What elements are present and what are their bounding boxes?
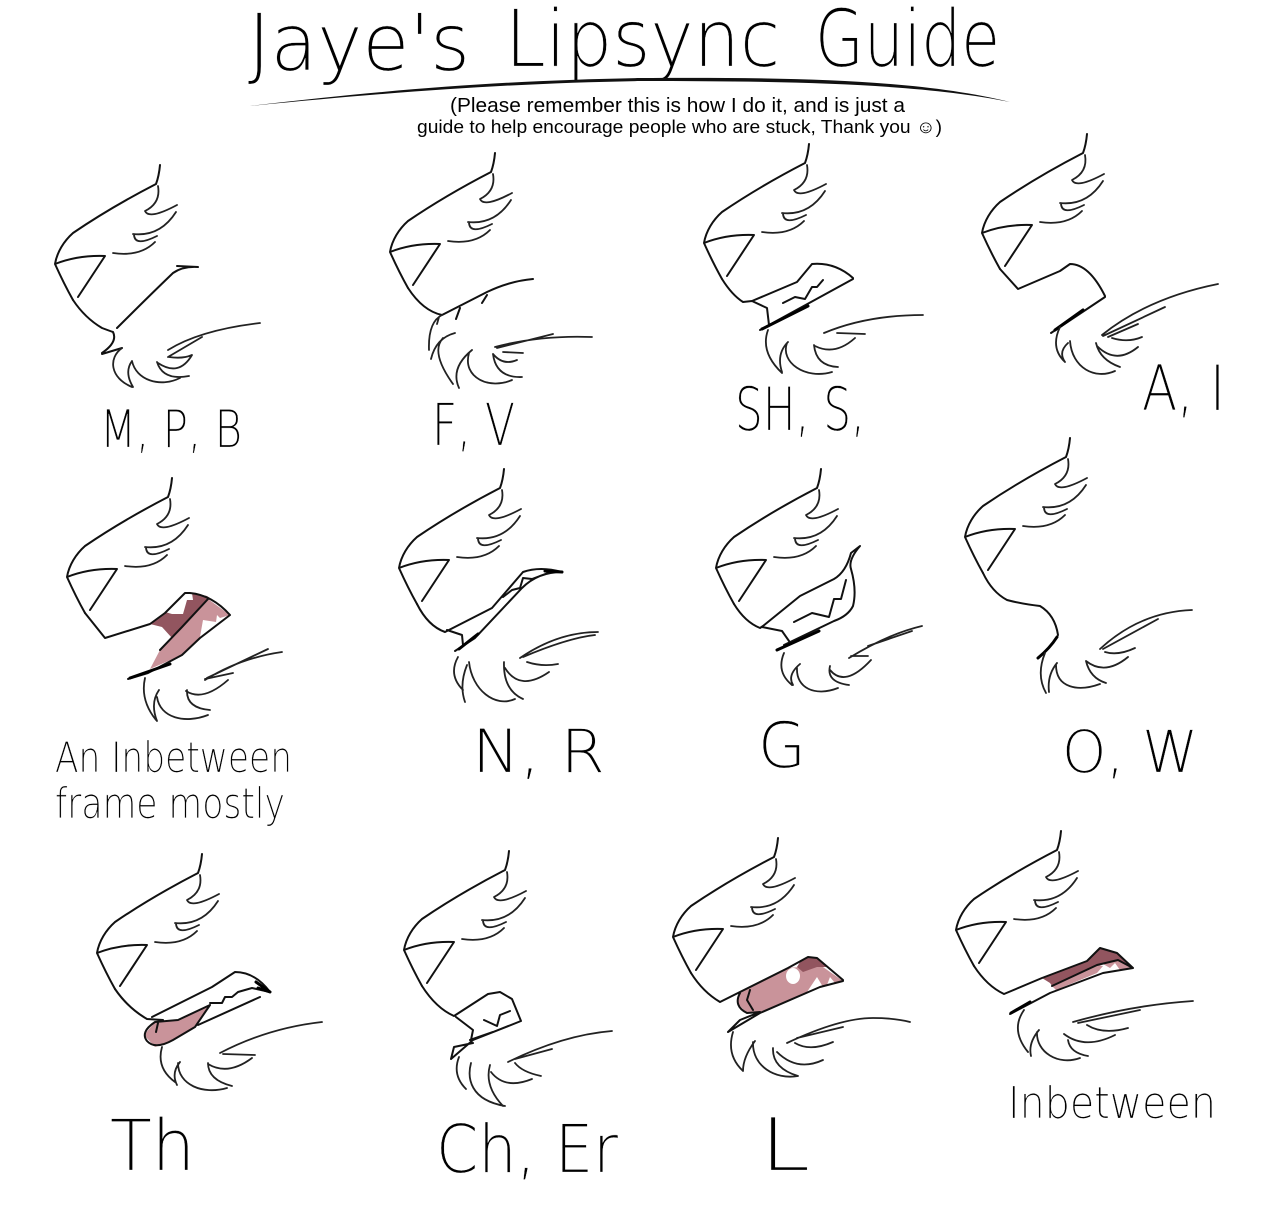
mouth outline bbox=[691, 957, 843, 1032]
mouth roof dark bbox=[797, 957, 828, 972]
mouth roof dark bbox=[1042, 948, 1133, 986]
fur and whisker bbox=[731, 1018, 910, 1077]
panel: Th bbox=[97, 854, 322, 1187]
panel: Ch, Er bbox=[404, 851, 619, 1188]
fur and whisker bbox=[766, 315, 923, 374]
label: M, P, B bbox=[100, 400, 242, 460]
subtitle note bbox=[417, 95, 942, 137]
fur and whisker bbox=[1041, 610, 1192, 693]
wide open mouth bbox=[734, 546, 860, 645]
panel: O, W bbox=[965, 438, 1198, 786]
jaw accent bbox=[1038, 637, 1057, 658]
jaw accent bbox=[1011, 1002, 1030, 1013]
narrow mouth bbox=[417, 569, 562, 651]
jaw accent bbox=[459, 571, 562, 649]
pursed lips bbox=[983, 573, 1058, 635]
panel: inbetween frame bbox=[55, 478, 292, 782]
title underline swoosh bbox=[250, 78, 1010, 106]
label: A, I bbox=[1142, 352, 1225, 425]
panel: L bbox=[673, 838, 910, 1187]
panel: F, V bbox=[390, 153, 592, 459]
tongue bbox=[737, 962, 843, 1013]
subtitle note: guide to help encourage people who are stuck, Thank you ☺) bbox=[417, 117, 942, 137]
mouth tooth highlight bbox=[786, 968, 800, 984]
open mouth with teeth bbox=[722, 264, 853, 330]
fur and whisker bbox=[781, 626, 922, 691]
label: Ch, Er bbox=[436, 1111, 619, 1188]
panel: inbetween bbox=[956, 831, 1216, 1129]
jaw accent bbox=[777, 631, 819, 650]
tongue bbox=[150, 599, 230, 669]
label: N, R bbox=[472, 717, 605, 787]
fur and whisker bbox=[1018, 1001, 1193, 1060]
label: F, V bbox=[432, 391, 515, 459]
fur and whisker bbox=[457, 1031, 612, 1106]
jaw outline bbox=[85, 593, 230, 679]
label: Th bbox=[110, 1105, 195, 1187]
title bbox=[248, 0, 1000, 89]
fur and whisker bbox=[1056, 284, 1218, 374]
fur and whisker bbox=[429, 315, 592, 388]
label: L bbox=[760, 1103, 810, 1187]
label: SH, S, bbox=[735, 375, 865, 445]
tongue bbox=[144, 1005, 210, 1047]
open mouth bbox=[1000, 264, 1105, 333]
mouth outline and tongue edge bbox=[115, 972, 270, 1045]
fur and whisker bbox=[161, 1022, 322, 1090]
lower jaw bbox=[73, 266, 198, 354]
fur and whisker bbox=[144, 649, 282, 721]
subtitle note: (Please remember this is how I do it, and is just a bbox=[450, 95, 906, 117]
label: An Inbetween bbox=[55, 733, 292, 782]
mouth outline bbox=[974, 948, 1133, 1014]
jaw accent bbox=[762, 306, 808, 329]
tongue bbox=[1052, 960, 1133, 990]
fur and whisker bbox=[454, 632, 598, 702]
jaw accent bbox=[130, 664, 170, 678]
title: Jaye's bbox=[248, 0, 470, 89]
fur and whisker bbox=[113, 323, 260, 387]
small open mouth bbox=[422, 986, 521, 1059]
panel: N, R bbox=[399, 469, 605, 787]
label: G bbox=[758, 709, 806, 782]
mouth interior dark bbox=[150, 593, 210, 638]
jaw accent bbox=[1055, 310, 1083, 330]
panel: M, P, B bbox=[55, 165, 260, 460]
jaw accent bbox=[256, 982, 270, 992]
lower jaw bbox=[408, 279, 533, 319]
panel: G bbox=[716, 469, 922, 782]
panel: SH, S bbox=[704, 144, 923, 445]
label: Inbetween bbox=[1008, 1078, 1216, 1129]
label: O, W bbox=[1062, 718, 1198, 786]
panel: A, I bbox=[982, 134, 1225, 425]
label: frame mostly: frame mostly bbox=[55, 779, 285, 828]
